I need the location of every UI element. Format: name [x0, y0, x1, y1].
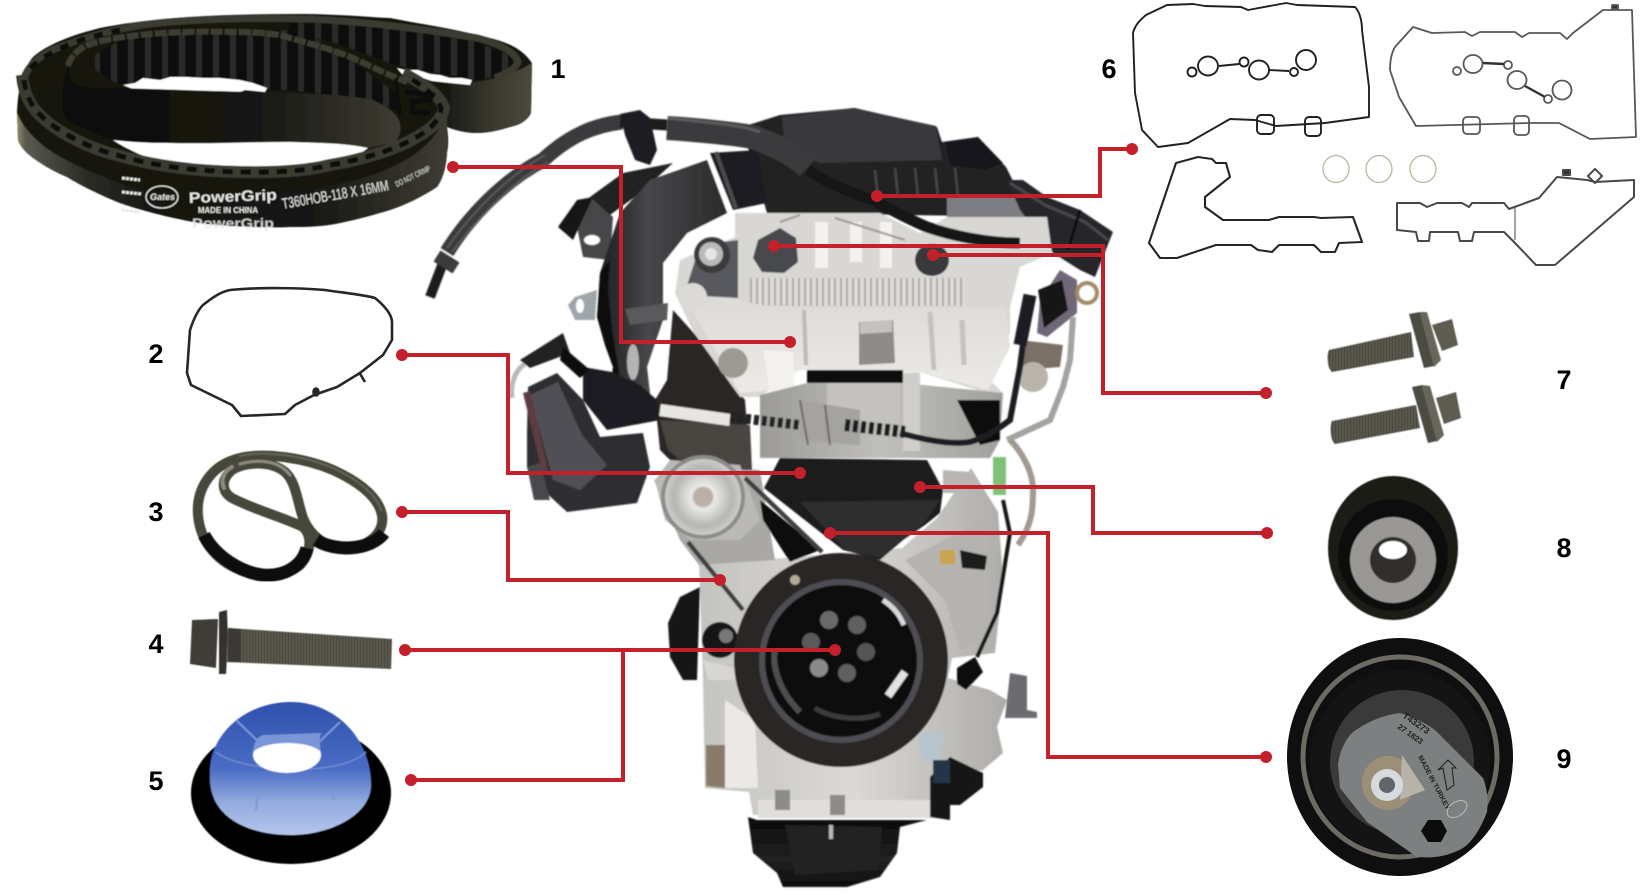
belt outer face [17, 113, 447, 227]
belt back face right [447, 63, 532, 133]
leader line: part 1 [447, 161, 796, 348]
leader line: part 6 [871, 143, 1138, 202]
bracket tab [568, 290, 597, 320]
coolant pipes [1007, 317, 1073, 440]
part 3: ribbed accessory belt [198, 454, 384, 575]
side sensor bracket [1005, 673, 1037, 718]
tensioner markings: MADE IN TURKEY [1416, 755, 1451, 811]
belt white gaps [123, 77, 267, 94]
bolt lower [1331, 385, 1461, 444]
part 1: timing belt [17, 14, 532, 231]
turbo air outlet pipe [1007, 180, 1113, 277]
belt lettering: MADE IN CHINA [198, 206, 258, 215]
throttle body [527, 373, 650, 512]
belt lettering: Gates [150, 192, 175, 202]
bolt upper [1328, 312, 1458, 372]
cylinder head [675, 213, 1052, 397]
mid block section [760, 383, 1003, 458]
leader line: part 2 [396, 349, 806, 479]
part 7: pair of camshaft bolts [1328, 312, 1461, 444]
number 8: 8 [1556, 533, 1572, 563]
oil cap left [753, 228, 798, 273]
left rear disc [668, 587, 700, 680]
tensioner markings: T43273 [1401, 710, 1432, 736]
crankshaft pulley [734, 553, 948, 767]
hose clamp [620, 110, 657, 165]
oil cap right [915, 244, 949, 276]
tensioner markings [1396, 710, 1470, 821]
intake pipe coupling [710, 150, 767, 210]
leader line: part 3 [396, 506, 726, 586]
upper mounting bracket [577, 197, 613, 260]
rear right cover [930, 757, 983, 820]
belt rim teeth [22, 18, 518, 172]
part 5: crankshaft oil seal [191, 702, 391, 864]
gasket lower right [1397, 169, 1634, 265]
turbo heat shield [1037, 270, 1077, 337]
number 5: 5 [148, 766, 164, 796]
gasket top right [1390, 5, 1636, 139]
left braided hose [430, 122, 667, 297]
shadow behind head [655, 310, 750, 470]
part 4: crank bolt [190, 610, 392, 674]
part 6: gasket set [1133, 3, 1636, 265]
belt toothed inside, front [95, 30, 400, 112]
number 2: 2 [148, 339, 164, 369]
lower block [699, 468, 1007, 818]
part 9: timing belt tensioner [1287, 638, 1513, 876]
belt lettering: DO NOT CRIMP [394, 164, 432, 189]
belt lettering: PowerGrip [192, 215, 274, 231]
belt central opening [113, 140, 368, 170]
oil pan [748, 817, 927, 887]
air filter box [742, 108, 1047, 217]
o-rings [1323, 156, 1436, 182]
part 2: timing cover gasket [187, 288, 392, 416]
leader line: part 7 [768, 240, 1272, 399]
number 6: 6 [1101, 54, 1117, 84]
gasket lower left [1149, 157, 1362, 258]
number 3: 3 [148, 497, 164, 527]
belt lettering: PowerGrip [189, 187, 277, 207]
throttle adaptor [583, 367, 660, 430]
gasket top left [1133, 3, 1369, 147]
engine harness wire [660, 410, 730, 420]
belt toothed inside, rear [290, 20, 515, 80]
leader line: part 5 [405, 650, 623, 786]
part 8: idler pulley [1328, 476, 1458, 620]
belt inner band face [63, 67, 400, 148]
belt lettering: T360HOB-118 X 16MM [281, 177, 390, 213]
number 9: 9 [1556, 744, 1572, 774]
tensioner markings: 27 1823 [1396, 722, 1425, 747]
head bolts [694, 237, 730, 273]
number 1: 1 [550, 54, 566, 84]
water pump pulley [655, 460, 760, 540]
leader line: part 9 [824, 527, 1272, 763]
leader line: part 8 [914, 481, 1273, 539]
timing cover [764, 458, 943, 560]
engine [430, 108, 1113, 887]
leader line: part 4 [399, 644, 841, 656]
belt lettering [122, 164, 432, 231]
number 4: 4 [148, 629, 164, 659]
intake hose [597, 160, 727, 410]
number 7: 7 [1556, 365, 1572, 395]
engine top hose [667, 128, 808, 167]
